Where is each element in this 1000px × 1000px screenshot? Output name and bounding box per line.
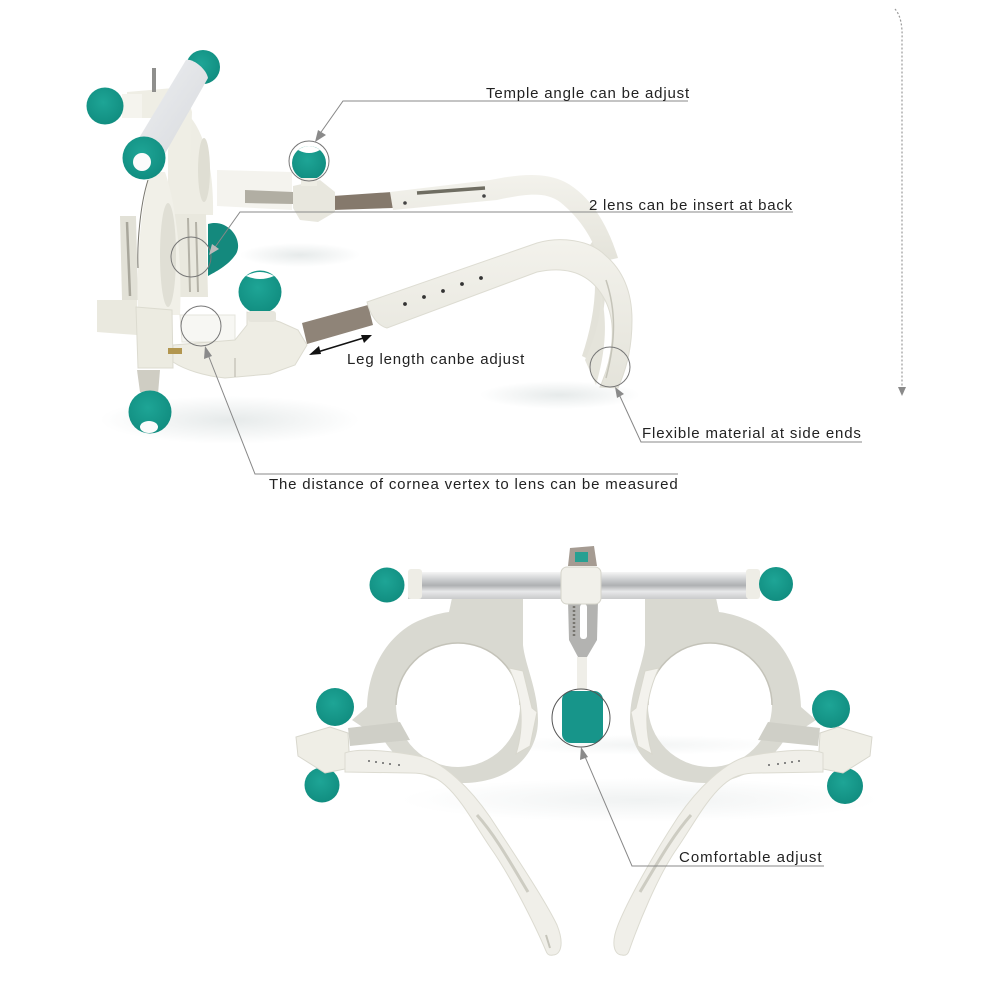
right lens holder inner rim bbox=[648, 643, 772, 705]
right lens holder bbox=[630, 598, 816, 783]
centre bridge slider bbox=[561, 546, 603, 743]
far temple arm bbox=[217, 170, 618, 360]
teal balls side view bbox=[86, 88, 326, 434]
product: front view of trial frame bbox=[296, 546, 880, 955]
callout: comfortable adjust: Comfortable adjust bbox=[679, 849, 823, 866]
left lens holder inner rim bbox=[396, 643, 520, 705]
decorative dotted arrow at right bbox=[895, 9, 906, 396]
rear lens holder ring bbox=[120, 108, 238, 300]
near temple arm bbox=[302, 240, 632, 388]
callout: flexible material bbox=[590, 347, 862, 442]
top bar bbox=[408, 572, 748, 599]
right temple bbox=[614, 750, 823, 955]
left temple bbox=[345, 750, 561, 955]
lens clips bbox=[509, 668, 537, 754]
left clamp mechanism bbox=[296, 727, 350, 773]
callout: cornea vertex: The distance of cornea vertex to lens can be measured bbox=[269, 476, 679, 493]
callout: leg length bbox=[309, 335, 525, 368]
callout: cornea vertex bbox=[181, 306, 679, 493]
callout: 2 lens can be insert at back: 2 lens can be insert at back bbox=[589, 197, 793, 214]
callout: 2 lens can be insert at back bbox=[171, 197, 793, 277]
product: side view of trial frame bbox=[86, 50, 640, 444]
callout: temple angle bbox=[289, 85, 690, 181]
callout: leg length: Leg length canbe adjust bbox=[347, 351, 525, 368]
callout: temple angle: Temple angle can be adjust bbox=[486, 85, 690, 102]
left rods bbox=[348, 722, 410, 746]
callout: flexible material: Flexible material at side ends bbox=[642, 425, 862, 442]
front lens holder ring bbox=[138, 172, 180, 315]
top bridge and bar bbox=[127, 50, 220, 170]
right clamp mechanism bbox=[818, 727, 872, 773]
bottom block and lens holder base bbox=[97, 300, 307, 394]
left lens holder bbox=[352, 598, 538, 783]
callout: comfortable adjust bbox=[552, 689, 824, 866]
right rods bbox=[758, 722, 820, 746]
teal balls front view bbox=[304, 567, 863, 804]
